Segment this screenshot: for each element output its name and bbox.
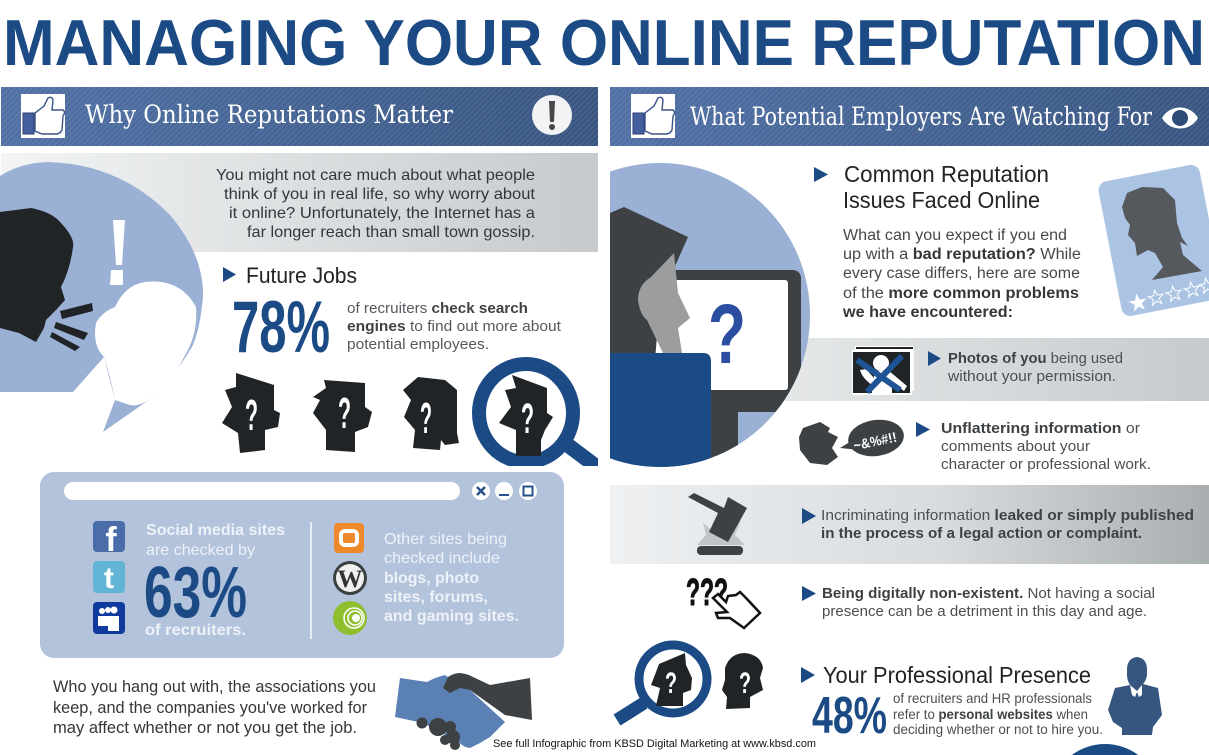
icon: businessman (1108, 657, 1162, 735)
text: unflattering: character or professional work. (941, 456, 1151, 473)
icon: twitter (93, 561, 125, 595)
icon: magnifier and heads: ? (739, 667, 751, 700)
question mark: ? (708, 287, 746, 381)
band: photos (610, 338, 1209, 401)
icon: blogger (334, 523, 364, 553)
text: unflattering: comments about your (941, 438, 1090, 455)
text: incriminating: Incriminating information leaked or simply published (821, 507, 1194, 524)
text: other sites: and gaming sites. (384, 608, 519, 625)
heading: future jobs: Future Jobs (246, 263, 357, 288)
icon: profile card (1097, 163, 1209, 317)
icon: magnifying glass (479, 364, 605, 473)
text: unflattering: Unflattering information or (941, 420, 1140, 437)
decorative circle (1072, 744, 1138, 755)
text: common problems intro: of the more common problems (843, 285, 1079, 302)
heading: Why Online Reputations Matter (85, 100, 453, 129)
person body (610, 353, 711, 470)
icons: candidate heads: ? (338, 389, 351, 438)
text: intro: think of you in real life, so why worry about (224, 186, 536, 203)
text: photos of you (928, 350, 1123, 385)
icons: candidate heads (222, 373, 459, 453)
heading: common reputation issues: Common Reputation (844, 161, 1049, 187)
heading: common reputation issues (814, 161, 1049, 213)
text: social media: Social media sites (146, 522, 285, 539)
icon: wordpress (333, 561, 367, 595)
text: other sites (384, 531, 519, 625)
icon: handshake (395, 673, 532, 750)
icon: question marks and cursor: ??? (686, 572, 728, 614)
text: intro: it online? Unfortunately, the Internet has a (229, 205, 535, 222)
band: legal (610, 485, 1209, 564)
icon: magnifying glass: ? (521, 395, 534, 443)
window buttons (472, 482, 537, 500)
text: common problems intro: What can you expect if you end (843, 227, 1067, 244)
text: intro (216, 167, 536, 241)
heading: common reputation issues: Issues Faced Online (843, 187, 1040, 213)
text: 78% description: engines to find out more about (347, 318, 562, 335)
stat: 78%: 78% (232, 287, 330, 368)
icon: swearing head (799, 416, 906, 465)
icon: facebook (93, 521, 125, 559)
text: other sites: blogs, photo (384, 570, 479, 587)
panel: potential employers header (610, 87, 1209, 146)
text: common problems intro: up with a bad reputation? While (843, 246, 1081, 263)
text: non-existent: presence can be a detriment in this day and age. (822, 603, 1147, 620)
text: associations: Who you hang out with, the associations you (53, 677, 376, 696)
text: other sites: checked include (384, 550, 500, 567)
icon: twitter: t (104, 562, 114, 595)
icon: thumbs up (21, 94, 65, 138)
text: 78% description (347, 300, 562, 353)
icon: magnifier and heads: ? (665, 667, 677, 700)
text: non-existent (802, 585, 1155, 620)
icon: magnifier and heads (617, 645, 763, 720)
text: unflattering (916, 420, 1151, 473)
panel: intro band (1, 153, 598, 252)
person hair (610, 207, 688, 360)
text: non-existent: Being digitally non-existent. Not having a social (822, 585, 1155, 602)
footer credit: See full Infographic from KBSD Digital Marketing at www.kbsd.com (493, 738, 816, 750)
icon: wordpress: W (338, 566, 362, 593)
icon: swearing head: ~&%#!! (852, 429, 898, 453)
icons: candidate heads: ? (420, 394, 432, 443)
text: common problems intro: every case differs, here are some (843, 265, 1080, 282)
text: common problems intro (842, 227, 1081, 321)
icon: thumbs up (631, 94, 675, 138)
address bar (64, 482, 460, 500)
stat: 63%: 63% (144, 553, 247, 633)
text: 48% description (893, 691, 1103, 737)
text: associations: may affect whether or not you get the job. (53, 718, 357, 737)
text: 78% description: potential employees. (347, 336, 489, 353)
panel: why online reputations matter header (1, 87, 598, 146)
monitor (656, 270, 801, 467)
heading: professional presence: Your Professional Presence (823, 662, 1091, 688)
icon: myspace (93, 602, 125, 634)
icon: exclamation (532, 95, 572, 135)
text: incriminating: in the process of a legal action or complaint. (821, 525, 1142, 542)
text: incriminating (802, 507, 1194, 542)
text: associations (53, 677, 376, 737)
text: photos of you: without your permission. (947, 368, 1116, 385)
text: 78% description: of recruiters check search (347, 300, 528, 317)
icon: green swirl (333, 601, 367, 635)
text: of recruiters: of recruiters. (145, 622, 246, 639)
text: common problems intro: we have encountered: (842, 304, 1013, 321)
text: photos of you: Photos of you being used (948, 350, 1123, 367)
icon: gavel (688, 493, 747, 555)
icons: candidate heads: ? (245, 391, 258, 440)
text: other sites: Other sites being (384, 531, 507, 548)
divider (310, 522, 312, 639)
icon: facebook: f (105, 521, 117, 559)
text: 48% description: of recruiters and HR professionals (893, 691, 1092, 706)
text: are checked by: are checked by (146, 542, 255, 559)
illustration: gossip whisper (0, 162, 203, 432)
text: 48% description: refer to personal websites when (893, 707, 1088, 722)
text: associations: keep, and the companies you've worked for (53, 698, 367, 717)
text: intro: You might not care much about what people (216, 167, 535, 184)
text: intro: far longer reach than small town gossip. (247, 224, 535, 241)
illustration: person at monitor (610, 163, 810, 467)
stat: 48%: 48% (812, 687, 887, 745)
person face (638, 253, 690, 353)
text: 48% description: deciding whether or not to hire you. (893, 722, 1103, 737)
panel: browser window (40, 472, 564, 658)
icon: eye (1162, 108, 1198, 128)
icon: crossed-out photo (852, 346, 914, 395)
text: other sites: sites, forums, (384, 589, 488, 606)
